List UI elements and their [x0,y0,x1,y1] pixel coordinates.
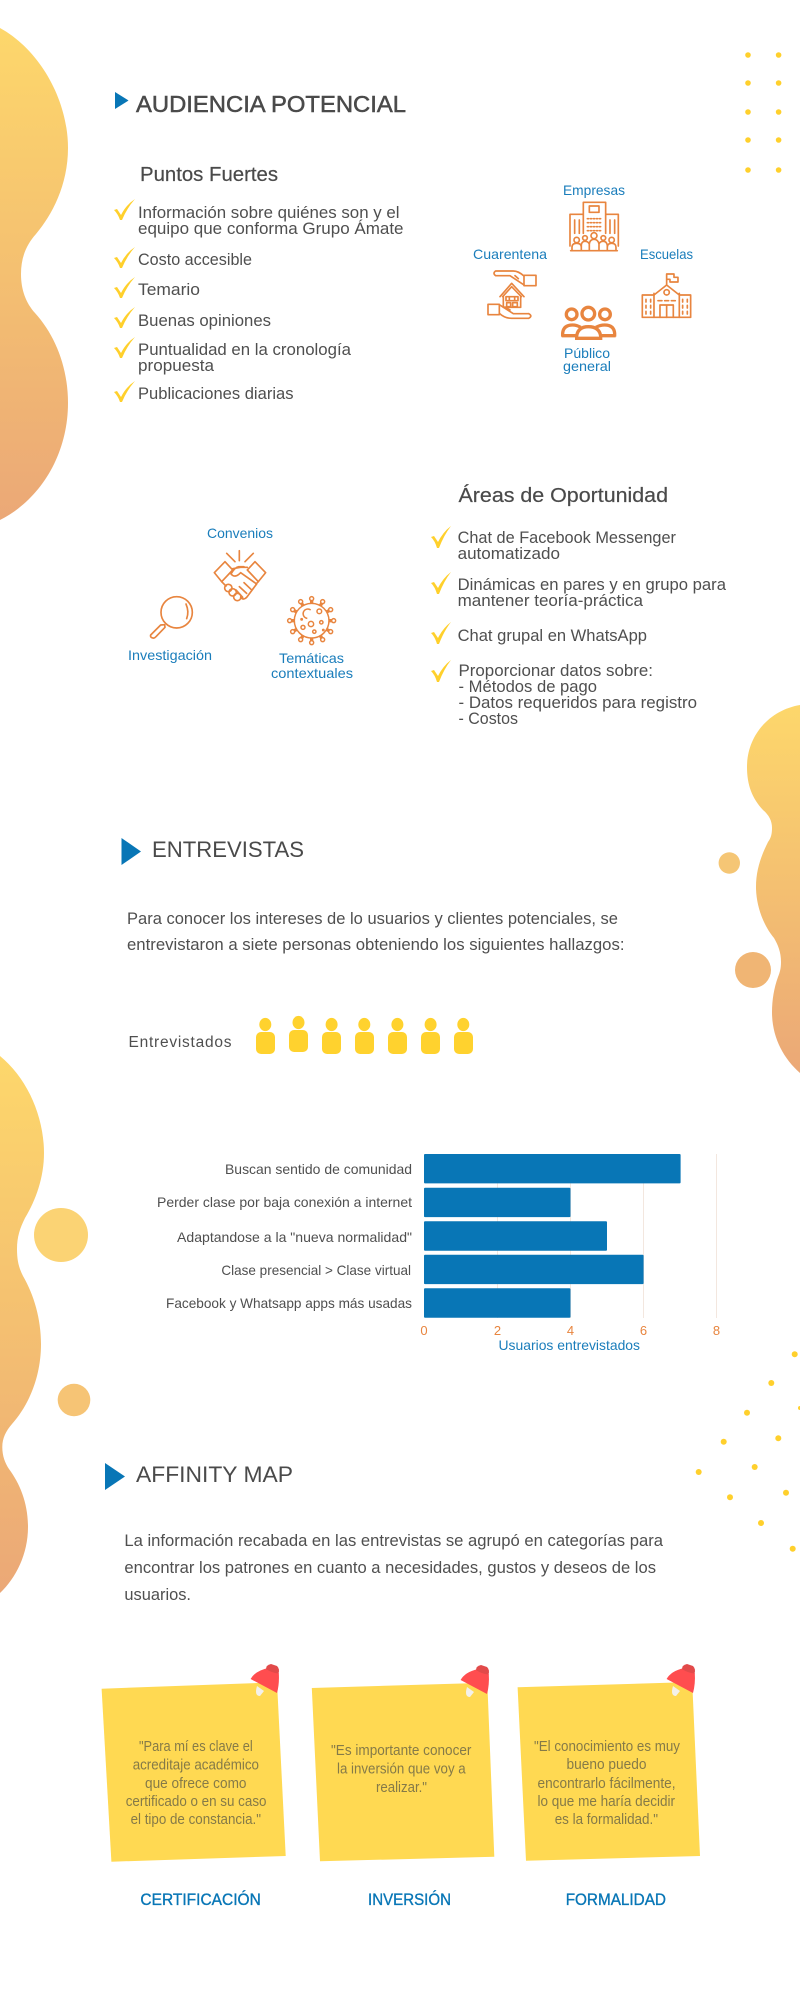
panel: audience icons [473,182,693,374]
subheading: Áreas de Oportunidad [458,484,668,507]
panel: opportunity icons [128,525,353,681]
pin [461,1665,489,1697]
icon: office building with people [570,202,618,251]
labels [128,525,353,681]
seven person icons [256,1016,473,1054]
arrow marker [105,1463,125,1490]
list items: Costo accesible [138,251,252,269]
icon: handshake [214,551,266,601]
checkmarks [431,526,451,682]
labels: Convenios [207,525,273,541]
decorative blob: top left [0,28,68,520]
quote [534,1739,681,1828]
category labels: Clase presencial > Clase virtual [221,1262,411,1278]
icon: house protected by hands [488,271,536,318]
list items: propuesta [138,357,215,375]
list items: automatizado [458,545,560,563]
quote: bueno puedo [566,1757,646,1773]
quote: acreditaje académico [133,1757,259,1773]
list items: - Costos [458,710,518,728]
panel: puntos fuertes [114,164,404,403]
labels: Escuelas [640,246,693,262]
quote: lo que me haría decidir [538,1794,675,1810]
icon: magnifying glass [151,597,192,638]
icon: group of people [562,307,616,338]
axis numbers: 4 [567,1323,574,1338]
note paper [312,1683,494,1861]
quote: es la formalidad." [555,1812,658,1828]
subheading: Puntos Fuertes [140,164,278,186]
checkmarks [114,199,135,402]
category labels: Perder clase por baja conexión a internet [157,1194,412,1210]
icon: virus [288,597,336,645]
quote [331,1743,472,1796]
list items: Buenas opiniones [138,312,271,330]
pictogram label: Entrevistados [128,1034,232,1051]
quote: que ofrece como [145,1776,246,1792]
quote: "Es importante conocer [331,1743,472,1759]
bar chart: hallazgos de entrevistas [157,1154,720,1353]
list items: equipo que conforma Grupo Ámate [138,219,404,238]
note paper [102,1682,286,1862]
labels [473,182,693,374]
quote: el tipo de constancia." [131,1812,261,1828]
heading text: ENTREVISTAS [152,837,304,862]
labels: Temáticas [279,650,344,666]
section: entrevistas heading [122,837,304,865]
decorative dots: top right [745,52,781,173]
category labels: Facebook y Whatsapp apps más usadas [166,1295,412,1311]
arrow marker [122,838,141,865]
labels: Investigación [128,647,212,663]
pin [251,1664,279,1696]
decorative blob: lower left [0,1056,90,1593]
section: affinity map heading [105,1462,293,1490]
labels: Cuarentena [473,246,547,262]
pictogram: entrevistados [128,1016,473,1054]
quote: "El conocimiento es muy [534,1739,681,1755]
decorative dots: scattered right [696,1351,800,1552]
list items: Publicaciones diarias [138,385,294,403]
sticky note: formalidad [518,1664,700,1909]
quote [126,1739,266,1828]
axis numbers: 6 [640,1323,647,1338]
axis numbers: 0 [420,1323,428,1338]
quote: "Para mí es clave el [139,1739,253,1755]
section: audiencia potencial heading [115,91,406,117]
text block: entrevistas intro [127,910,624,954]
category label: INVERSIÓN [368,1890,451,1909]
axis numbers: 2 [494,1323,501,1338]
category labels: Adaptandose a la "nueva normalidad" [177,1229,412,1245]
list items: Dinámicas en pares y en grupo para [458,576,727,594]
heading text: AUDIENCIA POTENCIAL [136,91,406,117]
sticky note: certificación [102,1664,286,1909]
category labels: Buscan sentido de comunidad [225,1161,412,1177]
text block: entrevistas intro: entrevistaron a siete personas obteniendo los siguientes hallazgos: [127,936,624,954]
category label: FORMALIDAD [566,1891,666,1909]
icon: school [642,274,691,317]
list items [138,204,404,403]
quote: la inversión que voy a [337,1761,467,1777]
list items: Chat grupal en WhatsApp [458,627,647,645]
axis title: Usuarios entrevistados [498,1337,640,1353]
quote: encontrarlo fácilmente, [538,1776,676,1792]
text block: affinity intro: La información recabada en las entrevistas se agrupó en categorías para [124,1532,664,1550]
list items: - Métodos de pago [458,678,597,696]
axis numbers: 8 [713,1323,720,1338]
panel: áreas de oportunidad [431,484,727,728]
arrow marker [115,92,128,109]
text block: affinity intro [124,1532,664,1604]
list items: Chat de Facebook Messenger [458,529,676,547]
category labels [157,1161,412,1311]
pin [667,1664,695,1696]
labels: Empresas [563,182,625,198]
quote: realizar." [376,1780,427,1796]
list items: Temario [138,281,200,299]
list items: Puntualidad en la cronología [138,341,352,359]
note paper [518,1682,700,1861]
decorative blob: middle right [719,705,800,1073]
list items: - Datos requeridos para registro [458,694,697,712]
labels: general [563,358,611,374]
quote: certificado o en su caso [126,1794,266,1810]
bars [424,1154,681,1318]
list items: Información sobre quiénes son y el [138,204,400,222]
list items: Proporcionar datos sobre: [458,662,653,680]
labels: Público [564,345,610,361]
sticky note: inversión [312,1665,494,1909]
text block: affinity intro: encontrar los patrones en cuanto a necesidades, gustos y deseos de los [124,1559,656,1577]
list items: mantener teoría-práctica [458,592,644,610]
category label: CERTIFICACIÓN [140,1890,261,1909]
text block: entrevistas intro: Para conocer los intereses de lo usuarios y clientes potenciales, se [127,910,618,928]
list items [458,529,727,728]
heading text: AFFINITY MAP [136,1462,293,1487]
axis numbers [420,1323,720,1338]
text block: affinity intro: usuarios. [124,1586,191,1604]
labels: contextuales [271,665,353,681]
